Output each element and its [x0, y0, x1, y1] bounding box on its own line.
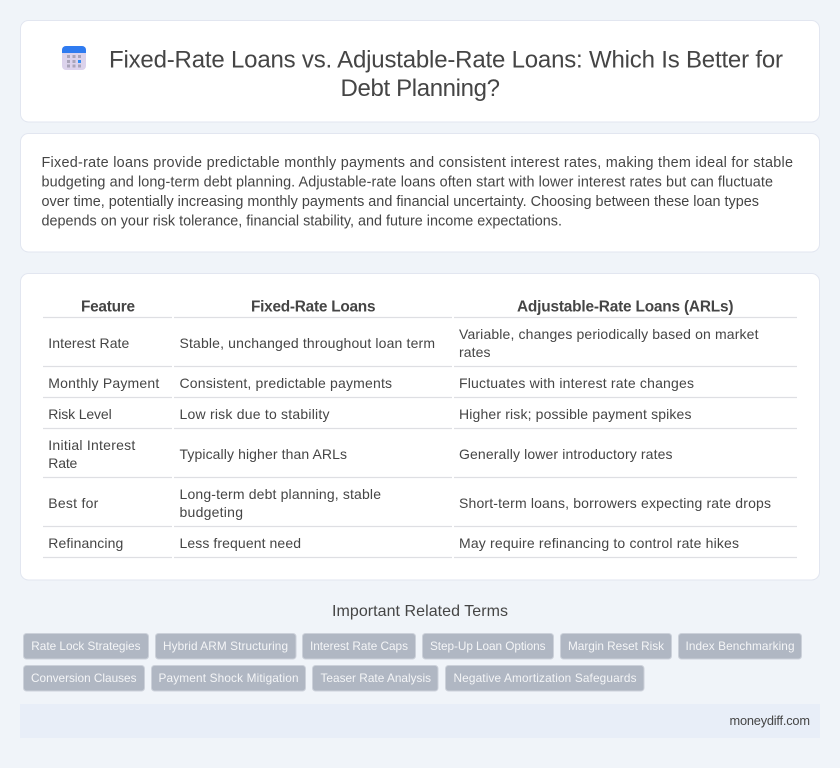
row: best for: Short-term loans, borrowers expecting rate drops: [459, 495, 771, 511]
tag: Teaser Rate Analysis: [320, 671, 431, 685]
title: Debt Planning?: [340, 75, 500, 102]
tag: [312, 666, 438, 691]
tag: Payment Shock Mitigation: [158, 671, 298, 685]
panel: header: [20, 20, 820, 122]
tag: Negative Amortization Safeguards: [454, 671, 637, 685]
row: interest rate: Interest Rate: [48, 335, 130, 351]
row: initial interest rate: Initial Interest: [48, 437, 135, 453]
row: interest rate: Stable, unchanged throughout loan term: [180, 335, 435, 351]
row: interest rate: [48, 326, 759, 360]
row: initial interest rate: Typically higher than ARLs: [180, 446, 347, 462]
row: best for: budgeting: [180, 504, 243, 520]
row: best for: Long-term debt planning, stable: [180, 486, 381, 502]
row: best for: [48, 486, 771, 520]
icon: calendar: [62, 46, 86, 70]
panel: related term tags: [24, 634, 802, 691]
panel: intro text: [20, 134, 820, 252]
row: monthly payment: Monthly Payment: [48, 375, 159, 391]
row: refinancing: May require refinancing to control rate hikes: [459, 535, 739, 551]
panel: intro text: over time, potentially increasing monthly payments and financial uncertainty. Choosing between these loan types: [42, 194, 759, 210]
footer: moneydiff.com: [730, 713, 810, 728]
tag: [156, 634, 296, 659]
row: initial interest rate: Rate: [48, 455, 78, 471]
heading: related terms: Important Related Terms: [332, 603, 508, 620]
panel: intro text: budgeting and long-term debt planning. Adjustable-rate loans often start with lower interest rates but can fluctuate: [42, 174, 773, 190]
row: risk level: [48, 406, 692, 422]
row: risk level: Low risk due to stability: [180, 406, 330, 422]
table header row: [81, 298, 734, 316]
table header row: Feature: [81, 298, 135, 316]
tag: Conversion Clauses: [31, 671, 137, 685]
tag: Step-Up Loan Options: [430, 639, 546, 653]
row: initial interest rate: Generally lower introductory rates: [459, 446, 672, 462]
footer: [20, 704, 820, 738]
row: refinancing: Less frequent need: [180, 535, 301, 551]
row: monthly payment: Consistent, predictable payments: [180, 375, 392, 391]
tag: Hybrid ARM Structuring: [163, 639, 288, 653]
row: best for: Best for: [48, 495, 99, 511]
tag: [422, 634, 554, 659]
table header row: Adjustable-Rate Loans (ARLs): [517, 298, 734, 316]
tag: [24, 634, 148, 659]
tag: [678, 634, 802, 659]
tag: [302, 634, 416, 659]
tag: [560, 634, 672, 659]
tag: Margin Reset Risk: [568, 639, 664, 653]
tag: Interest Rate Caps: [310, 639, 408, 653]
table header row: Fixed-Rate Loans: [251, 298, 376, 316]
row: refinancing: Refinancing: [48, 535, 123, 551]
title: Fixed-Rate Loans vs. Adjustable-Rate Loans: Which Is Better for: [109, 46, 783, 74]
row: monthly payment: Fluctuates with interest rate changes: [459, 375, 694, 391]
title: [109, 46, 783, 102]
panel: intro text: Fixed-rate loans provide predictable monthly payments and consistent interest rates, making them ideal for stable: [42, 155, 793, 171]
row: refinancing: [48, 535, 739, 551]
row: interest rate: Variable, changes periodically based on market: [459, 326, 759, 342]
panel: intro text: depends on your risk tolerance, financial stability, and future income expectations.: [42, 214, 562, 230]
tag: Index Benchmarking: [686, 639, 794, 653]
tag: [24, 666, 144, 691]
row: initial interest rate: [48, 437, 673, 471]
row: interest rate: rates: [459, 344, 490, 360]
tag: [446, 666, 644, 691]
row: risk level: Higher risk; possible payment spikes: [459, 406, 692, 422]
panel: comparison table: [20, 274, 820, 580]
tag: Rate Lock Strategies: [31, 639, 141, 653]
tag: [152, 666, 306, 691]
row: monthly payment: [48, 375, 694, 391]
row: risk level: Risk Level: [48, 406, 112, 422]
